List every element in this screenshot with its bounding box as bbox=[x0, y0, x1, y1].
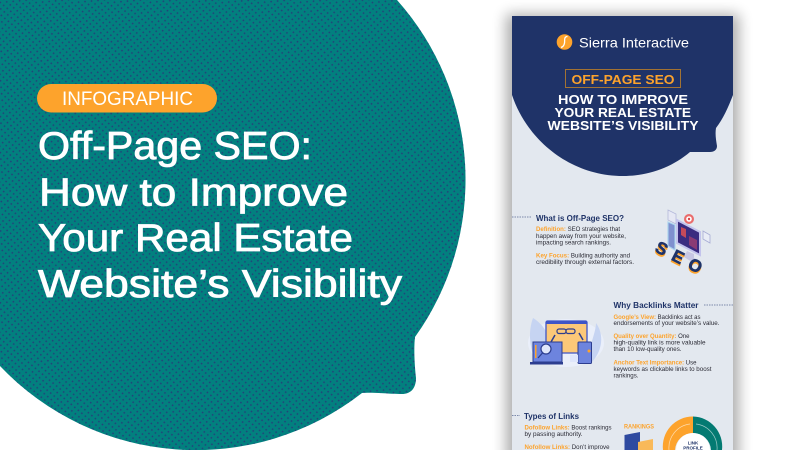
main title: Your Real Estate bbox=[38, 217, 353, 260]
section: Why Backlinks Matter: Quality over Quantity: One bbox=[614, 333, 690, 340]
donut: link profile: LINK bbox=[688, 440, 699, 446]
section: What is Off-Page SEO: What is Off-Page SEO? bbox=[536, 213, 624, 223]
section: What is Off-Page SEO: Key Focus: Building authority and bbox=[536, 252, 631, 260]
icon: SEO isometric monitor: SEO bbox=[652, 238, 705, 277]
infographic card shadow bbox=[506, 14, 739, 450]
section: What is Off-Page SEO bbox=[512, 213, 634, 266]
section: Why Backlinks Matter: Google’s View: Backlinks act as bbox=[614, 314, 700, 321]
icon: backlinks devices bbox=[528, 318, 604, 367]
category pill: INFOGRAPHIC: INFOGRAPHIC bbox=[62, 89, 193, 110]
rankings chart bbox=[624, 424, 654, 450]
icon: SEO isometric monitor: SEO bbox=[652, 239, 705, 279]
section: Why Backlinks Matter: Why Backlinks Matter bbox=[614, 300, 699, 310]
navy header shape bbox=[512, 16, 733, 176]
header title: HOW TO IMPROVE bbox=[558, 92, 688, 107]
section: Why Backlinks Matter: rankings. bbox=[614, 372, 639, 380]
teal halftone blob background bbox=[0, 0, 466, 450]
donut: link profile bbox=[663, 416, 722, 450]
section: What is Off-Page SEO: impacting search rankings. bbox=[536, 240, 611, 246]
section: Why Backlinks Matter: high-quality link is more valuable bbox=[614, 340, 706, 346]
logo: Sierra Interactive: Sierra Interactive bbox=[579, 34, 689, 50]
icon: SEO isometric monitor bbox=[655, 210, 710, 274]
section: Why Backlinks Matter bbox=[614, 300, 733, 380]
infographic preview card bbox=[512, 16, 733, 450]
main title bbox=[38, 125, 403, 306]
main title: How to Improve bbox=[39, 172, 348, 214]
section: Why Backlinks Matter: than 10 low-quality ones. bbox=[614, 346, 682, 353]
header title: WEBSITE’S VISIBILITY bbox=[548, 118, 699, 133]
section: What is Off-Page SEO: credibility through external factors. bbox=[536, 259, 634, 266]
heading badge: OFF-PAGE SEO: OFF-PAGE SEO bbox=[572, 72, 674, 87]
rankings chart: RANKINGS bbox=[624, 424, 654, 430]
category pill: INFOGRAPHIC bbox=[37, 84, 217, 112]
header title bbox=[548, 95, 698, 130]
section: Types of Links: Dofollow Links: Boost rankings bbox=[524, 424, 612, 432]
section: Why Backlinks Matter: endorsements of your website’s value. bbox=[614, 320, 720, 327]
section: Types of Links: by passing authority. bbox=[524, 431, 583, 438]
main title: Website’s Visibility bbox=[38, 263, 403, 306]
section: Types of Links bbox=[512, 411, 612, 450]
section: What is Off-Page SEO: happen away from your website, bbox=[536, 233, 626, 240]
main title: Off-Page SEO: bbox=[38, 125, 312, 168]
section: Types of Links: Types of Links bbox=[524, 411, 579, 421]
header title: YOUR REAL ESTATE bbox=[554, 105, 691, 120]
section: Why Backlinks Matter: keywords as clickable links to boost bbox=[614, 366, 712, 373]
section: Why Backlinks Matter: Anchor Text Importance: Use bbox=[614, 360, 697, 366]
section: What is Off-Page SEO: Definition: SEO strategies that bbox=[536, 226, 620, 233]
